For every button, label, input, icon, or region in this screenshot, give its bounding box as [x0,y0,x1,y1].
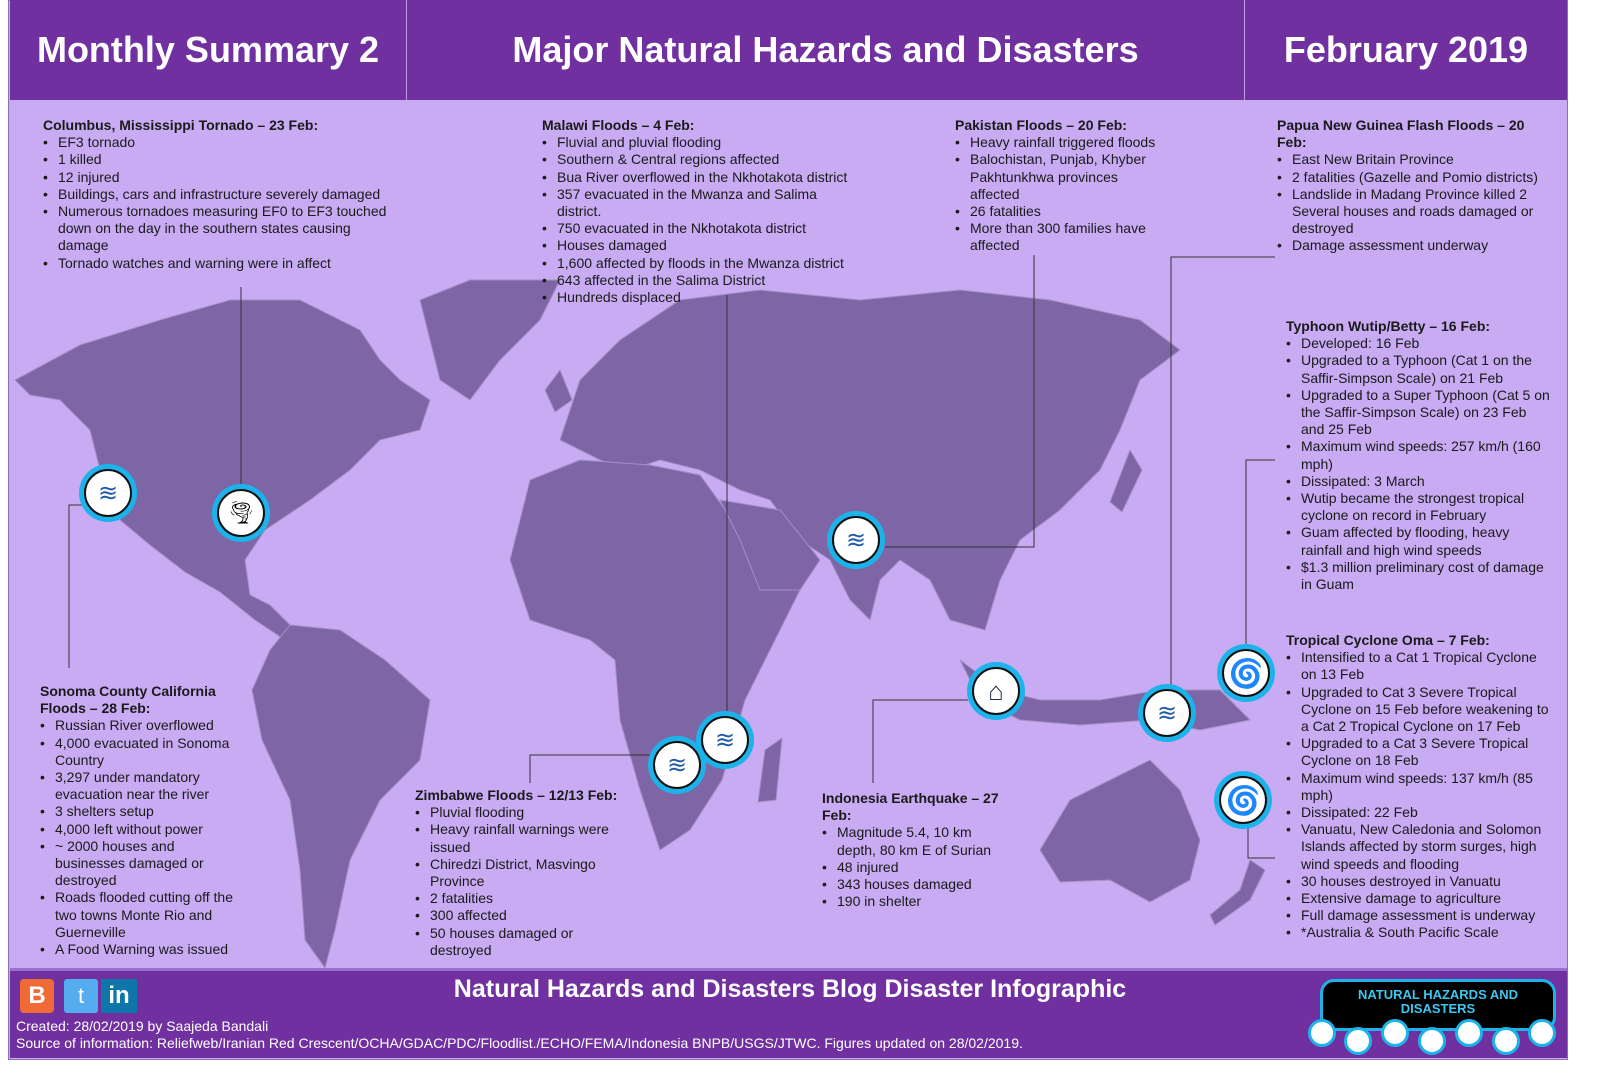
header: monthly summary [10,0,407,100]
text: Sonoma floods: 3 shelters setup [55,803,154,819]
text: Indonesia earthquake: 48 injured [837,859,898,875]
logo: DISASTERS [1401,1001,1475,1016]
text: Malawi floods: 1,600 affected by floods in the Mwanza district [557,255,844,271]
credits: Created: 28/02/2019 by Saajeda Bandali [16,1018,268,1034]
header: monthly summary: Monthly Summary 2 [37,29,379,70]
icon: cyclone Wutip [1217,644,1275,702]
icon: flood Malawi: ≋ [715,726,735,754]
social icons: t [78,983,84,1008]
header: date [1245,0,1567,100]
text: PNG floods: East New Britain Province [1292,151,1454,167]
icon: flood Zimbabwe [648,736,706,794]
text: Columbus tornado: 12 injured [58,169,120,185]
text: Columbus tornado: EF3 tornado [58,134,135,150]
text: Zimbabwe floods: 300 affected [430,907,507,923]
text: Malawi floods: Hundreds displaced [557,289,681,305]
text: Zimbabwe floods: Chiredzi District, Masvingo Province [430,856,596,889]
header: date: February 2019 [1284,29,1528,70]
text: Indonesia earthquake: Indonesia Earthquake – 27 Feb: [822,790,999,823]
text: Cyclone Oma: *Australia & South Pacific Scale [1301,924,1499,940]
text: Indonesia earthquake: 190 in shelter [837,893,921,909]
text: Pakistan floods: Balochistan, Punjab, Khyber Pakhtunkhwa provinces affected [970,151,1146,202]
credits: Source of information: Reliefweb/Iranian Red Crescent/OCHA/GDAC/PDC/Floodlist./ECHO/FEMA/Indonesia BNPB/USGS/JTWC. Figures updated on 28/02/2019. [16,1035,1023,1051]
text: Pakistan floods: More than 300 families have affected [970,220,1146,253]
text: Cyclone Oma: Vanuatu, New Caledonia and Solomon Islands affected by storm surges, high wind speeds and flooding [1301,821,1541,872]
icon: earthquake: ⌂ [988,676,1004,706]
text: Typhoon Wutip: Guam affected by flooding, heavy rainfall and high wind speeds [1301,524,1509,558]
text: Cyclone Oma: Upgraded to Cat 3 Severe Tropical Cyclone on 15 Feb before weakening to a Cat 2 Tropical Cyclone on 17 Feb [1301,684,1548,734]
text: Indonesia earthquake: Magnitude 5.4, 10 km depth, 80 km E of Surian [837,824,991,858]
text: Malawi floods: Fluvial and pluvial flooding [557,134,721,150]
text: PNG floods [1277,117,1538,253]
text: Cyclone Oma: Extensive damage to agriculture [1301,890,1501,906]
text: Indonesia earthquake: 343 houses damaged [837,876,972,892]
social icons [20,979,137,1013]
text: Pakistan floods: Pakistan Floods – 20 Feb: [955,117,1127,133]
text: PNG floods: Papua New Guinea Flash Floods – 20 Feb: [1277,117,1524,150]
text: Cyclone Oma: Dissipated: 22 Feb [1301,804,1418,820]
text: Sonoma floods [40,683,233,957]
text: Sonoma floods: 3,297 under mandatory evacuation near the river [55,769,209,802]
text: Cyclone Oma: Maximum wind speeds: 137 km/h (85 mph) [1301,770,1533,803]
text: Malawi floods: Southern & Central regions affected [557,151,779,167]
text: Typhoon Wutip: Upgraded to a Super Typhoon (Cat 5 on the Saffir-Simpson Scale) on 23 Feb and 25 Feb [1301,387,1550,437]
text: Zimbabwe floods: Heavy rainfall warnings were issued [430,821,609,855]
icon: flood California: ≋ [98,480,118,506]
text: Typhoon Wutip [1286,318,1550,592]
text: Sonoma floods: Roads flooded cutting off the two towns Monte Rio and Guerneville [55,889,233,940]
text: Malawi floods: 643 affected in the Salima District [557,272,765,288]
icon: flood California [79,464,137,522]
text: Zimbabwe floods: 2 fatalities [430,890,493,906]
footer title: Natural Hazards and Disasters Blog Disaster Infographic [454,975,1126,1003]
footer [10,968,1567,1058]
icon: cyclone Oma: 🌀 [1226,784,1260,816]
text: Columbus tornado [43,117,386,271]
text: Sonoma floods: Russian River overflowed [55,717,214,733]
text: Indonesia earthquake [822,790,999,909]
text: Sonoma floods: A Food Warning was issued [55,941,228,957]
text: Columbus tornado: Buildings, cars and infrastructure severely damaged [58,186,380,202]
icon: flood Pakistan [827,511,885,569]
text: Cyclone Oma: Tropical Cyclone Oma – 7 Feb: [1286,632,1490,648]
text: Pakistan floods: 26 fatalities [970,203,1041,219]
credits [16,1018,1023,1051]
text: Pakistan floods [955,117,1155,253]
text: Zimbabwe floods: 50 houses damaged or destroyed [430,925,573,958]
text: Typhoon Wutip: Maximum wind speeds: 257 km/h (160 mph) [1301,438,1541,472]
icon: cyclone Oma [1214,771,1272,829]
text: Cyclone Oma: Full damage assessment is underway [1301,907,1535,923]
text: Malawi floods: 750 evacuated in the Nkhotakota district [557,220,806,236]
text: Malawi floods: Malawi Floods – 4 Feb: [542,117,694,133]
text: Sonoma floods: 4,000 left without power [55,821,203,837]
text: Zimbabwe floods: Pluvial flooding [430,804,524,820]
icon: flood Zimbabwe: ≋ [667,752,687,778]
text: Columbus tornado: Tornado watches and warning were in affect [58,255,331,271]
text: Malawi floods: Bua River overflowed in the Nkhotakota district [557,169,847,185]
text: Malawi floods: 357 evacuated in the Mwanza and Salima district. [557,186,817,219]
icon: tornado [212,484,270,542]
text: Typhoon Wutip: Upgraded to a Typhoon (Cat 1 on the Saffir-Simpson Scale) on 21 Feb [1301,352,1532,386]
icon: flood PNG [1138,684,1196,742]
text: Cyclone Oma: Intensified to a Cat 1 Tropical Cyclone on 13 Feb [1301,649,1537,682]
logo [1308,979,1556,1055]
icon: tornado: 🌪 [227,500,255,525]
text: Columbus tornado: Numerous tornadoes measuring EF0 to EF3 touched down on the day in the southern states causing damage [58,203,386,253]
text: Zimbabwe floods [415,787,617,958]
social icons: in [108,982,130,1009]
text: Sonoma floods: Sonoma County California Floods – 28 Feb: [40,683,216,716]
header: title: Major Natural Hazards and Disasters [512,29,1139,70]
text: Columbus tornado: Columbus, Mississippi Tornado – 23 Feb: [43,117,318,133]
text: Typhoon Wutip: Developed: 16 Feb [1301,335,1419,351]
icon: earthquake [967,662,1025,720]
text: Typhoon Wutip: $1.3 million preliminary cost of damage in Guam [1301,559,1544,592]
text: Malawi floods: Houses damaged [557,237,667,253]
text: PNG floods: 2 fatalities (Gazelle and Pomio districts) [1292,169,1538,185]
icon: flood PNG: ≋ [1157,700,1177,726]
social icons: B [28,982,46,1009]
icon: flood Malawi [696,711,754,769]
text: Typhoon Wutip: Wutip became the strongest tropical cyclone on record in February [1301,490,1524,523]
header: title [407,0,1245,100]
text: PNG floods: Damage assessment underway [1292,237,1488,253]
logo: NATURAL HAZARDS AND [1358,987,1518,1002]
text: Malawi floods [542,117,848,305]
text: Typhoon Wutip: Typhoon Wutip/Betty – 16 Feb: [1286,318,1490,334]
text: Typhoon Wutip: Dissipated: 3 March [1301,473,1425,489]
text: Cyclone Oma [1286,632,1548,940]
text: Cyclone Oma: Upgraded to a Cat 3 Severe Tropical Cyclone on 18 Feb [1301,735,1528,768]
text: Cyclone Oma: 30 houses destroyed in Vanuatu [1301,873,1501,889]
text: PNG floods: Landslide in Madang Province killed 2 Several houses and roads damaged or destroyed [1292,186,1533,236]
text: Sonoma floods: 4,000 evacuated in Sonoma Country [55,735,229,768]
text: Zimbabwe floods: Zimbabwe Floods – 12/13 Feb: [415,787,617,803]
text: Sonoma floods: ~ 2000 houses and businesses damaged or destroyed [55,838,204,888]
icon: flood Pakistan: ≋ [846,526,866,554]
icon: cyclone Wutip: 🌀 [1229,658,1263,688]
text: Pakistan floods: Heavy rainfall triggered floods [970,134,1155,150]
text: Columbus tornado: 1 killed [58,151,102,167]
